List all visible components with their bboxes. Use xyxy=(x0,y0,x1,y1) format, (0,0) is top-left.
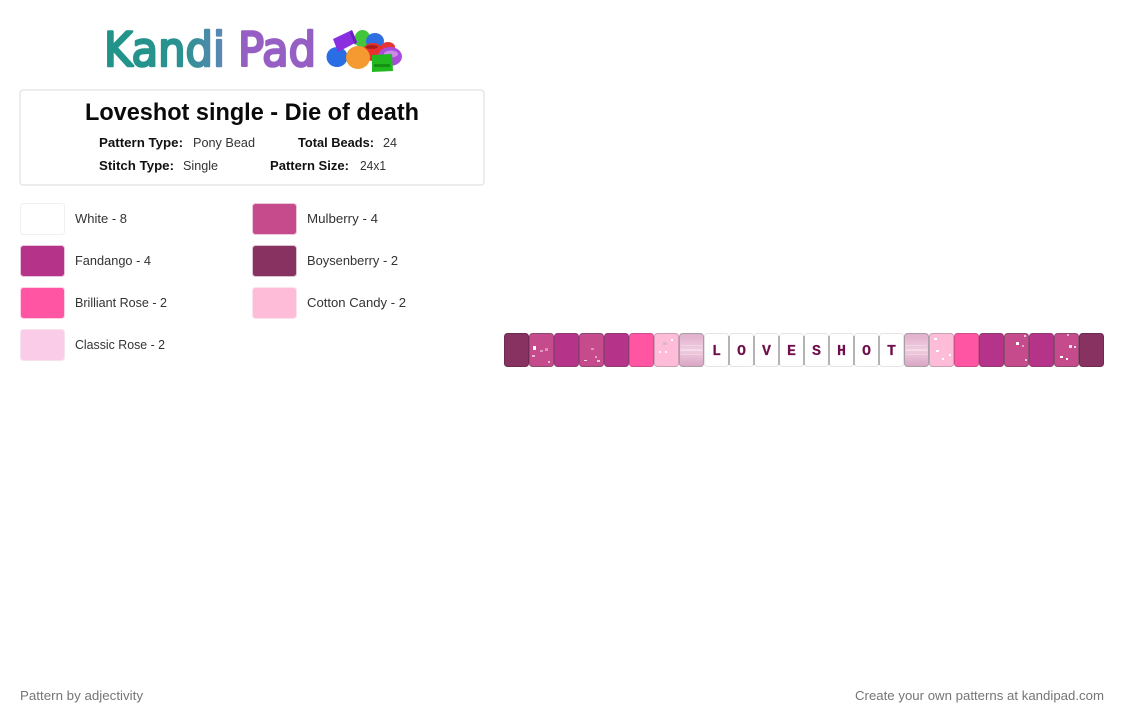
legend: mulberry xyxy=(252,204,378,234)
pattern type xyxy=(99,135,255,150)
legend: cotton candy xyxy=(252,288,406,318)
beads: LOVESHOT letters: V xyxy=(762,343,771,360)
total beads: Total Beads: xyxy=(298,135,374,150)
legend: cotton candy: Cotton Candy - 2 xyxy=(307,295,406,310)
bead pattern strip xyxy=(504,334,1104,366)
icon: pile of beads xyxy=(326,30,402,72)
legend: brilliant rose: Brilliant Rose - 2 xyxy=(75,295,167,310)
legend xyxy=(20,204,406,360)
beads: LOVESHOT letters: O xyxy=(862,343,871,360)
logo wordmark: Pad xyxy=(238,23,316,78)
legend: boysenberry: Boysenberry - 2 xyxy=(307,253,398,268)
pattern size xyxy=(270,158,386,173)
legend: fandango: Fandango - 4 xyxy=(75,253,151,268)
legend: classic rose: Classic Rose - 2 xyxy=(75,337,165,352)
pattern type: Pony Bead xyxy=(193,135,255,150)
stitch type xyxy=(99,158,218,173)
pattern size: Pattern Size: xyxy=(270,158,349,173)
pattern size: 24x1 xyxy=(360,158,386,173)
logo xyxy=(104,23,402,78)
legend: brilliant rose xyxy=(20,288,167,318)
stitch type: Single xyxy=(183,158,218,173)
logo wordmark: Kandi xyxy=(104,23,225,78)
legend: white xyxy=(20,204,127,234)
bead sparkles xyxy=(532,334,1076,363)
legend: white: White - 8 xyxy=(75,211,127,226)
footer: link: Create your own patterns at kandipad.com xyxy=(855,688,1104,703)
beads: right colour run xyxy=(904,334,1104,366)
beads: LOVESHOT letters: L xyxy=(712,343,721,360)
beads: left colour run xyxy=(504,334,704,366)
beads: LOVESHOT letters: T xyxy=(887,343,896,360)
logo wordmark xyxy=(104,23,316,78)
beads: LOVESHOT letters: O xyxy=(737,343,746,360)
total beads: 24 xyxy=(383,135,397,150)
panel: pattern info xyxy=(20,90,484,185)
footer: credit: Pattern by adjectivity xyxy=(20,688,144,703)
beads: LOVESHOT letters: H xyxy=(837,343,846,360)
beads: LOVESHOT letters: S xyxy=(812,343,821,360)
beads: LOVESHOT letters: E xyxy=(787,343,796,360)
legend: boysenberry xyxy=(252,246,398,276)
legend: classic rose xyxy=(20,330,165,360)
title: Loveshot single - Die of death xyxy=(85,99,419,126)
metallic bead stripes xyxy=(681,345,927,355)
pattern type: Pattern Type: xyxy=(99,135,183,150)
legend: mulberry: Mulberry - 4 xyxy=(307,211,378,226)
legend: fandango xyxy=(20,246,151,276)
beads: LOVESHOT letters xyxy=(704,334,904,366)
stitch type: Stitch Type: xyxy=(99,158,174,173)
